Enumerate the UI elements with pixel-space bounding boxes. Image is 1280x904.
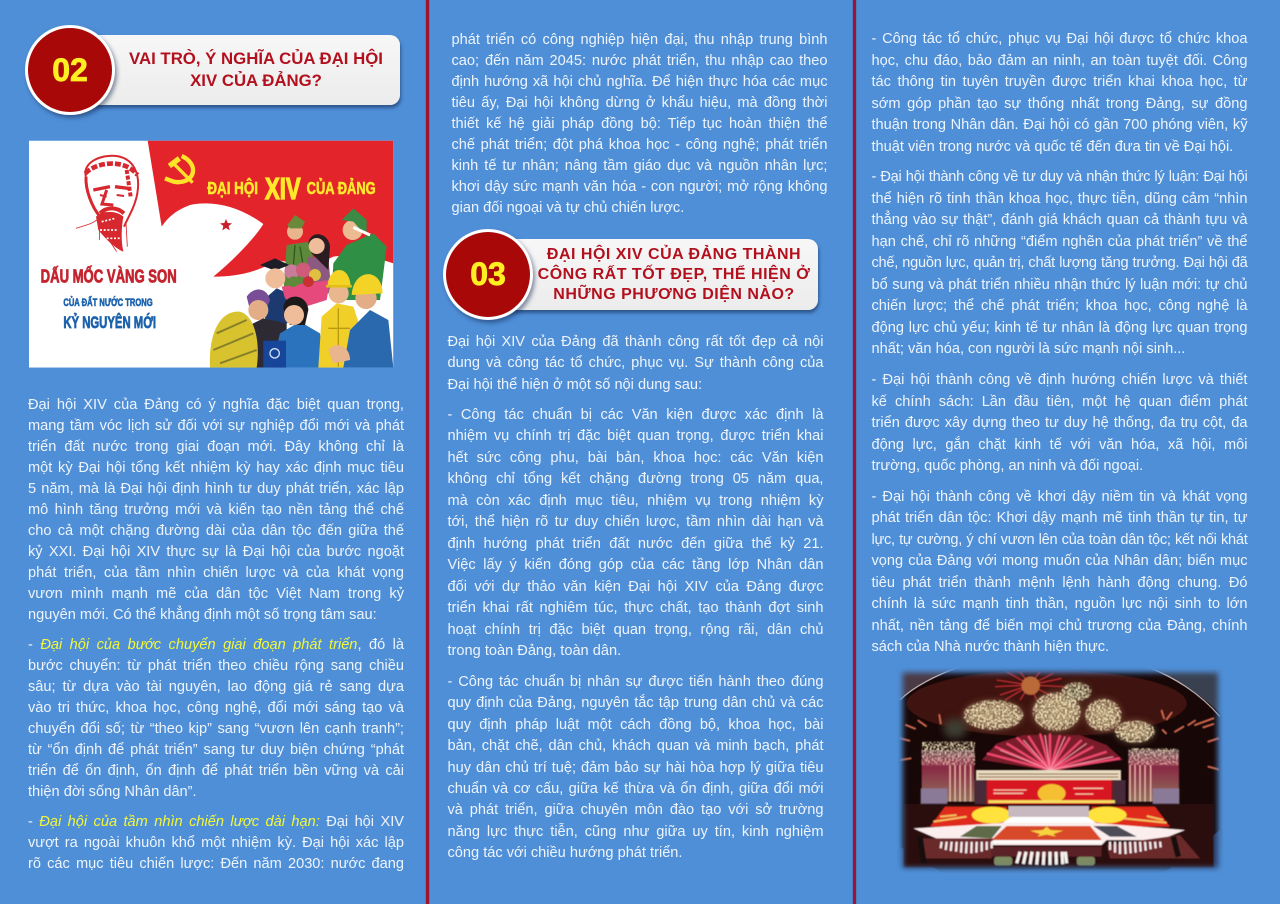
paragraph: introduction: Đại hội XIV của Đảng có ý nghĩa đặc biệt quan trọng, [28,397,404,413]
paragraph: introduction: phát triển, của tầm nhìn chiến lược và của khát vọng [28,565,404,581]
paragraph: mục tiêu tiếp theo: phát triển có công nghiệp hiện đại, thu nhập trung bình [452,32,828,48]
paragraph: chuẩn bị nhân sự: huy dân chủ trí tuệ; đảm bảo sự hài hòa hợp lý giữa tiêu [448,760,824,776]
paragraph: định hướng chiến lược: triển được xây dựng theo tư duy hệ thống, đa trụ cột, đa [872,415,1248,431]
paragraph: chuẩn bị nhân sự: bản, chặt chẽ, dân chủ, khách quan và minh bạch, phát [448,738,824,754]
paragraph: tư duy và lý luận: bổ sung và phát triển nhiều nhận thức lý luận mới: tự chủ [872,276,1248,292]
side sparks [900,711,1218,769]
paragraph: mục tiêu tiếp theo: cao; đến năm 2045: nước phát triển, thu nhập cao theo [452,53,828,69]
poster title text: XIV [265,172,301,206]
paragraph: tổ chức phục vụ: - Công tác tổ chức, phục vụ Đại hội được tổ chức khoa [872,31,1248,47]
paragraph: chuẩn bị văn kiện: định hướng phát triển đất nước đến giữa thế kỷ 21. [448,536,824,552]
paragraph: niềm tin và khát vọng: phát triển dân tộc: Khơi dậy mạnh mẽ tinh thần tự tin, tự [872,510,1248,526]
paragraph: introduction: mô hình tăng trưởng mới và kiến tạo nền tảng thể chế [28,502,404,518]
heading text 02: VAI TRÒ, Ý NGHĨA CỦA ĐẠI HỘI [129,49,383,68]
poster title text: KỶ NGUYÊN MỚI [63,313,156,332]
paragraph: chuẩn bị văn kiện: nhiệm vụ chính trị đặc biệt quan trọng, được triển khai [448,428,824,444]
heading text 03: ĐẠI HỘI XIV CỦA ĐẢNG THÀNH [547,246,801,263]
poster title text: CỦA ĐẢNG [307,178,376,198]
paragraph: chuẩn bị nhân sự: chuẩn và cơ cấu, giữa kế thừa và ổn định, giữa đổi mới [448,781,824,797]
paragraph: introduction: vươn mình mạnh mẽ của dân tộc Việt Nam trong kỷ [28,586,404,602]
hammer and sickle [165,156,193,183]
paragraph: tư duy và lý luận: động lực chủ yếu; kinh tế tư nhân là động lực quan trọng [872,320,1248,336]
paragraph: chuẩn bị nhân sự: quy định pháp luật một cách đồng bộ, khoa học, bài [448,717,824,733]
paragraph: niềm tin và khát vọng: vọng của Đảng với mong muốn của Nhân dân; biến mục [872,553,1248,569]
paragraph: mục tiêu tiếp theo: khơi dậy sức mạnh văn hóa - con người; mở rộng không [452,179,828,195]
paragraph: tư duy và lý luận: thể hiện rõ tinh thần khoa học, thực tiễn, dũng cảm “nhìn [872,190,1248,206]
number badge 03 [443,229,533,320]
paragraph: mục tiêu tiếp theo: kinh tế tư nhân; nâng tầm giáo dục và nguồn nhân lực; [452,158,828,174]
paragraph: chuẩn bị văn kiện: trong toàn Đảng, toàn dân. [448,643,621,659]
ceiling corners [900,670,950,699]
paragraph: tầm nhìn chiến lược: rõ các mục tiêu chiến lược: Đến năm 2030: nước đang [28,856,404,872]
paragraph: chuẩn bị nhân sự: - Công tác chuẩn bị nhân sự được tiến hành theo đúng [448,674,824,690]
paragraph: tư duy và lý luận: - Đại hội thành công về tư duy và nhận thức lý luận: Đại hội [872,169,1248,185]
paragraph: tư duy và lý luận: chế, nguồn lực, quản trị, chất lượng tăng trưởng. Đại hội đã [872,255,1248,271]
photo: fireworks at the congress celebration [898,668,1223,873]
paragraph: niềm tin và khát vọng: lực, tự cường, ý chí vươn lên của toàn dân tộc; kết nối khát [872,532,1248,548]
paragraph: tư duy và lý luận: thẳng vào sự thật”, đánh giá khách quan cả thành tựu và [872,212,1248,228]
poster title text: DẤU MỐC VÀNG SON [41,266,177,287]
number badge 02: 02 [52,52,88,88]
top truss [976,770,1121,780]
poster title text: ĐẠI HỘI [207,178,258,198]
stage floor band [913,823,1185,845]
paragraph: tổ chức phục vụ: học, chu đáo, bảo đảm an ninh, an toàn tuyệt đối. Công [872,52,1248,68]
paragraph: bước chuyển giai đoạn: - Đại hội của bước chuyển giai đoạn phát triển, đó là [28,637,404,653]
paragraph: chuẩn bị nhân sự: năng lực thực tiễn, cũng như giữa uy tín, kinh nghiệm [448,824,824,840]
heading text 02: XIV CỦA ĐẢNG? [190,71,322,90]
number badge 03: 03 [470,256,506,292]
people illustration [210,208,393,368]
poster title text [41,172,376,332]
small screens [921,788,947,804]
paragraph: bước chuyển giai đoạn: thiện đời sống Nhân dân”. [28,784,197,800]
crowd formations [992,826,1102,840]
paragraph: introduction [28,397,404,623]
paragraph: tư duy và lý luận: chiến lược; thể chế phát triển; khoa học, công nghệ là [872,298,1248,314]
paragraph: tư duy và lý luận: nhất; văn hóa, con người là sức mạnh nội sinh... [872,341,1185,357]
paragraph: niềm tin và khát vọng: - Đại hội thành công về khơi dậy niềm tin và khát vọng [872,489,1248,505]
paragraph: chuẩn bị văn kiện: đối với dự thảo văn kiện Đại hội XIV của Đảng được [448,579,824,595]
paragraph: bước chuyển giai đoạn [28,637,404,800]
paragraph: mục tiêu tiếp theo: tiêu ấy, Đại hội không dừng ở khẩu hiệu, mà đồng thời [452,95,828,111]
paragraph: định hướng chiến lược: - Đại hội thành công về định hướng chiến lược và thiết [872,372,1248,388]
heading text 03: NHỮNG PHƯƠNG DIỆN NÀO? [553,286,795,303]
star [220,219,232,230]
paragraph: chuẩn bị nhân sự [448,674,824,861]
paragraph: chuẩn bị văn kiện: hết sức công phu, bài bản, khoa học: các Văn kiện [448,450,824,466]
column divider left [426,0,429,904]
paragraph: chuẩn bị nhân sự: quy định của Đảng, nguyên tắc tập trung dân chủ và các [448,695,824,711]
paragraph: niềm tin và khát vọng: sách của Nhà nước thành hiện thực. [872,639,1109,655]
paragraph: mục tiêu tiếp theo: chế phát triển; đột phá khoa học - công nghệ; phát triển [452,137,828,153]
paragraph: introduction: triển đất nước trong giai đoạn mới. Đây không chỉ là [28,439,404,455]
paragraph: chuẩn bị nhân sự: công tác với chiều hướng phát triển. [448,845,682,861]
paragraph: niềm tin và khát vọng: nhất, nền tảng để biến mọi chủ trương của Đảng, chính [872,618,1248,634]
heading text 03 [538,244,810,303]
poster image: Đại hội XIV [29,140,394,368]
paragraph: mục tiêu tiếp theo: định hướng xã hội chủ nghĩa. Để hiện thực hóa các mục [452,74,828,90]
paragraph: bước chuyển giai đoạn: triển để ổn định, ổn định để phát triển bền vững và cải [28,763,404,779]
firework clusters [943,683,1153,742]
main screen [987,780,1112,804]
heading pill 02 [75,35,400,105]
heading text 03: CÔNG RẤT TỐT ĐẸP, THỂ HIỆN Ở [538,266,810,283]
paragraph: chuẩn bị văn kiện: Việc lấy ý kiến đóng góp của các tầng lớp Nhân dân [448,557,824,573]
heading 03 [442,229,821,326]
paragraph: introduction: 5 năm, mà là Đại hội định hình tư duy phát triển, xác lập [28,481,404,497]
poster title text: CỦA ĐẤT NƯỚC TRONG [63,296,153,309]
paragraph: mục tiêu tiếp theo: gian đối ngoại và tự chủ chiến lược. [452,200,684,216]
paragraph: bước chuyển giai đoạn: vào tri thức, khoa học, công nghệ, đổi mới sáng tạo và [28,700,404,716]
paragraph: tầm nhìn chiến lược: vượt ra ngoài khuôn khổ một nhiệm kỳ. Đại hội xác lập [28,835,404,851]
paragraph: introduction: cho cả một chặng đường dài của dân tộc đến giữa thế [28,523,404,539]
paragraph: bước chuyển giai đoạn: chuyển đổi số; từ “theo kịp” sang “vươn lên cạnh tranh”; [28,721,404,737]
paragraph: mục tiêu tiếp theo [452,32,828,216]
paragraph: bước chuyển giai đoạn: sâu; từ dựa vào tài nguyên, lao động giá rẻ sang dựa [28,679,404,695]
number badge 02 [25,25,115,115]
paragraph: niềm tin và khát vọng: chính là sức mạnh tinh thần, nguồn lực nội sinh to lớn [872,596,1248,612]
central fan [982,735,1123,771]
paragraph: introduction: một kỳ Đại hội tổng kết nhiệm kỳ hay xác định mục tiêu [28,460,404,476]
paragraph: mở đầu mục 03: Đại hội thể hiện ở một số nội dung sau: [448,377,702,393]
heading 02 [24,25,403,120]
paragraph: định hướng chiến lược: trường, quốc phòng, an ninh và đối ngoại. [872,458,1143,474]
paragraph: tổ chức phục vụ: thuận trong Nhân dân. Đại hội có gần 700 phóng viên, kỹ [872,117,1248,133]
side fountains [922,750,974,802]
paragraph: tầm nhìn chiến lược: - Đại hội của tầm nhìn chiến lược dài hạn: Đại hội XIV [28,814,404,830]
paragraph: introduction: mang tầm vóc lịch sử đối với sự nghiệp đổi mới và phát [28,418,404,434]
paragraph: định hướng chiến lược [872,372,1248,474]
paragraph: mục tiêu tiếp theo: thiết kế hệ giải pháp đồng bộ: Tiếp tục hoàn thiện thể [452,116,828,132]
paragraph: bước chuyển giai đoạn: từ “ổn định để phát triển” sang tư duy biện chứng “phát [28,742,404,758]
paragraph: tầm nhìn chiến lược [28,814,404,872]
paragraph: chuẩn bị văn kiện: hoạt chính trị đặc biệt quan trọng, rộng rãi, dân chủ [448,622,824,638]
paragraph: tư duy và lý luận [872,169,1248,357]
paragraph: mở đầu mục 03: Đại hội XIV của Đảng đã thành công rất tốt đẹp cả nội [448,334,824,350]
portrait [76,156,138,252]
paragraph: introduction: kỷ XXI. Đại hội XIV thực sự là Đại hội của bước ngoặt [28,544,404,560]
stage base [903,804,1213,867]
heading text 02 [129,48,383,90]
paragraph: chuẩn bị văn kiện: - Công tác chuẩn bị các Văn kiện được xác định là [448,407,824,423]
paragraph: chuẩn bị văn kiện: không chỉ tổng kết chặng đường trong 05 năm qua, [448,471,824,487]
paragraph: tư duy và lý luận: hạn chế, chỉ rõ những “điểm nghẽn của phát triển” về thể [872,234,1248,250]
paragraph: tổ chức phục vụ [872,31,1248,154]
paragraph: định hướng chiến lược: kế chính sách: Lần đầu tiên, một hệ quan điểm phát [872,394,1248,410]
column divider right [853,0,856,904]
paragraph: niềm tin và khát vọng [872,489,1248,655]
paragraph: chuẩn bị văn kiện [448,407,824,659]
paragraph: mở đầu mục 03 [448,334,824,393]
paragraph: tổ chức phục vụ: thuật viên trong nước và quốc tế đến đưa tin về Đại hội. [872,138,1233,154]
paragraph: bước chuyển giai đoạn: bước chuyển: từ phát triển theo chiều rộng sang chiều [28,658,404,674]
top burst [995,672,1065,700]
paragraph: tổ chức phục vụ: sớm góp phần tạo sự thống nhất trong Đảng, sự đồng [872,96,1248,112]
paragraph: tổ chức phục vụ: tác thông tin tuyên truyền được triển khai khoa học, từ [872,74,1248,90]
heading pill 03 [493,239,818,310]
paragraph: chuẩn bị văn kiện: mà còn xác định mục tiêu, nhiệm vụ trong nhiệm kỳ [448,493,824,509]
paragraph: chuẩn bị văn kiện: tới, thể hiện rõ tư duy chiến lược, tầm nhìn dài hạn và [448,514,824,530]
paragraph: introduction: nguyên mới. Có thể khẳng định một số trọng tâm sau: [28,607,377,623]
side towers [975,780,987,805]
paragraph: chuẩn bị nhân sự: và phát triển, giữa chuyên môn đào tạo với sở trường [448,802,824,818]
paragraph: định hướng chiến lược: động lực, gắn chặt kinh tế với văn hóa, xã hội, môi [872,436,1248,452]
paragraph: chuẩn bị văn kiện: triển khai rất nghiêm túc, thực chất, tạo thành đợt sinh [448,600,824,616]
paragraph: niềm tin và khát vọng: tiêu phát triển thành mệnh lệnh hành động chung. Đó [872,575,1248,591]
paragraph: mở đầu mục 03: dung và công tác tổ chức, phục vụ. Sự thành công của [448,355,824,371]
